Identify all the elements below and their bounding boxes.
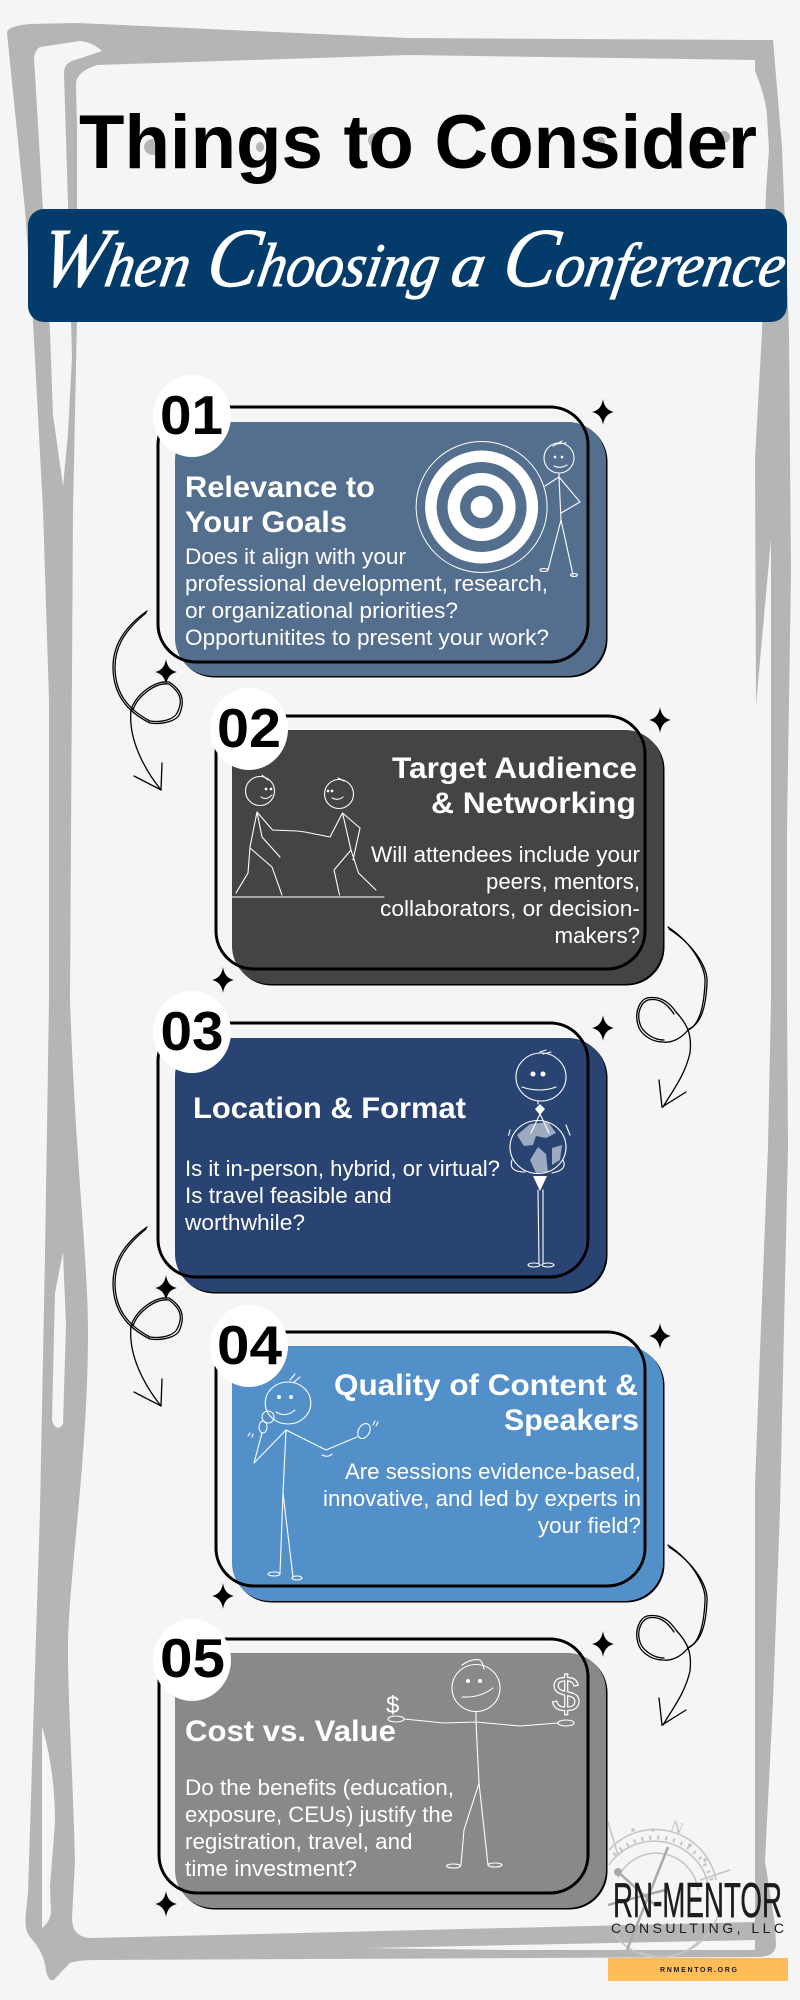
panel: 01 relevance to your goals (153, 375, 608, 678)
panel: 03 location and format (153, 991, 608, 1294)
icon: stick figure beside target (540, 441, 580, 576)
body text: exposure, CEUs) justify the (185, 1802, 453, 1827)
icon: figure balancing dollar signs (388, 1660, 574, 1868)
body text: collaborators, or decision- (380, 896, 640, 921)
heading: Target Audience (392, 752, 637, 785)
number badge 03: 03 (160, 1000, 224, 1062)
body text (184, 1156, 500, 1235)
icon: small dollar sign: $ (386, 1692, 399, 1719)
heading: Relevance to (185, 471, 375, 504)
number badge 01: 01 (160, 384, 223, 446)
body text: peers, mentors, (486, 869, 640, 894)
icon: target (416, 442, 547, 572)
body text: worthwhile? (184, 1210, 305, 1235)
body text: professional development, research, (185, 571, 548, 596)
body text: registration, travel, and (185, 1829, 412, 1854)
subtitle banner: Choosing (201, 213, 449, 305)
subtitle banner: a (447, 230, 492, 300)
arrow 4 to 5 (637, 1545, 707, 1725)
body text: time investment? (185, 1856, 357, 1881)
body text: Will attendees include your (371, 842, 640, 867)
number badge 05 (153, 1619, 231, 1701)
sparkles (155, 399, 671, 1917)
body text (185, 544, 549, 650)
body text: your field? (538, 1513, 641, 1538)
body text: makers? (554, 923, 640, 948)
body text: Are sessions evidence-based, (345, 1459, 641, 1484)
icon: compass watermark: N (668, 1816, 686, 1839)
icon: figure speaking into microphone (248, 1374, 378, 1580)
heading: Speakers (504, 1404, 639, 1437)
heading: Quality of Content & (334, 1369, 638, 1402)
panel: 02 target audience and networking (210, 688, 664, 986)
panel: 05 cost vs value (153, 1619, 608, 1910)
subtitle banner: Conference (497, 213, 795, 305)
heading: & Networking (431, 787, 636, 820)
heading: Location & Format (193, 1092, 466, 1125)
panel: 04 quality of content and speakers (210, 1305, 664, 1602)
body text: Is travel feasible and (185, 1183, 392, 1208)
icon: compass watermark (608, 1816, 730, 1958)
number badge 02: 02 (217, 697, 281, 759)
body text: Opportunitites to present your work? (185, 625, 549, 650)
arrow 2 to 3 (637, 927, 707, 1107)
icon: two figures shaking hands (232, 775, 384, 897)
heading (185, 471, 375, 539)
body text: or organizational priorities? (185, 598, 458, 623)
subtitle banner (28, 209, 795, 322)
body text (185, 1775, 454, 1881)
number badge 01 (153, 375, 231, 457)
body text: innovative, and led by experts in (323, 1486, 641, 1511)
heading: Cost vs. Value (185, 1715, 396, 1748)
logo subtitle: CONSULTING, LLC (611, 1920, 784, 1936)
subtitle banner: When (34, 213, 200, 305)
body text (371, 842, 640, 948)
number badge 04 (210, 1305, 288, 1387)
heading (334, 1369, 639, 1437)
website badge (608, 1958, 788, 1981)
heading (392, 752, 637, 820)
number badge 05: 05 (160, 1627, 225, 1689)
logo: RN-Mentor Consulting (608, 1816, 788, 1981)
body text: Is it in-person, hybrid, or virtual? (185, 1156, 500, 1181)
heading: Your Goals (185, 506, 347, 539)
icon: figure holding globe (509, 1050, 570, 1267)
website badge: RNMENTOR.ORG (660, 1967, 738, 1974)
arrow 3 to 4 (113, 1227, 182, 1406)
number badge 02 (210, 688, 288, 770)
number badge 03 (153, 991, 231, 1073)
title: Things to Consider (79, 100, 757, 185)
icon: large dollar sign: $ (552, 1666, 580, 1722)
arrow 1 to 2 (113, 611, 182, 790)
body text: Does it align with your (185, 544, 406, 569)
body text: Do the benefits (education, (185, 1775, 454, 1800)
body text (323, 1459, 641, 1538)
number badge 04: 04 (217, 1314, 282, 1376)
